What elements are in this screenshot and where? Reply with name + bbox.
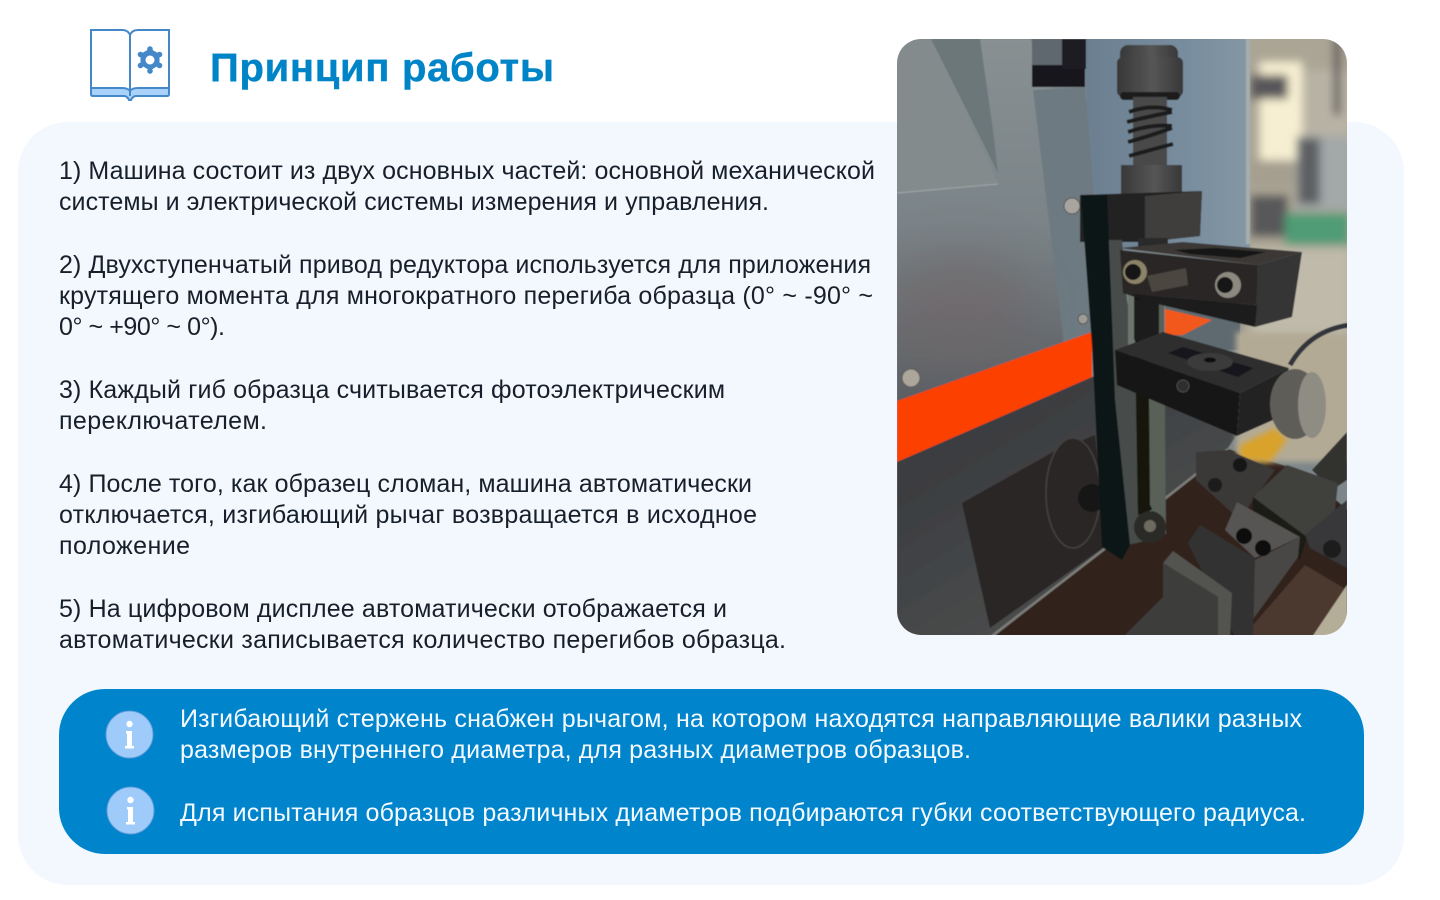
panel: notes callout — [59, 689, 1364, 854]
icon: info 2 — [107, 787, 154, 834]
title: Принцип работы — [210, 46, 554, 90]
text block: principle list: 4) После того, как образец сломан, машина автоматически — [59, 470, 752, 498]
text block: principle list: 0° ~ +90° ~ 0°). — [59, 313, 225, 341]
lower body — [897, 370, 1240, 640]
text block: note 1: Изгибающий стержень снабжен рычагом, на котором находятся направляющие валики разных — [180, 705, 1302, 733]
vertical arm — [1081, 195, 1130, 560]
text block: principle list: крутящего момента для многократного перегиба образца (0° ~ -90° ~ — [59, 282, 873, 310]
dark slot — [1032, 39, 1062, 65]
gap behind clamps — [1164, 306, 1240, 350]
text block: principle list — [59, 157, 875, 654]
text block: principle list: автоматически записывается количество перегибов образца. — [59, 626, 786, 654]
text block: principle list: переключателем. — [59, 407, 267, 435]
icon: info 1 — [106, 711, 153, 758]
top block — [1080, 191, 1202, 242]
text block: principle list: системы и электрической системы измерения и управления. — [59, 188, 769, 216]
blurred background right — [1236, 332, 1356, 462]
die blocks — [1120, 450, 1347, 640]
photo: bending test machine clamp — [890, 30, 1360, 645]
orange stripe — [897, 332, 1092, 462]
text block: note 1 — [180, 705, 1302, 764]
text block: principle list: положение — [59, 532, 190, 560]
text block: principle list: 2) Двухступенчатый привод редуктора используется для приложения — [59, 251, 871, 279]
lower clamp — [1115, 332, 1326, 439]
text block: principle list: отключается, изгибающий рычаг возвращается в исходное — [59, 501, 757, 529]
upper clamp — [1120, 242, 1302, 327]
icon: book with gear — [91, 30, 169, 100]
arm rails — [1108, 240, 1143, 545]
mounted plate — [962, 435, 1107, 628]
text block: principle list: 1) Машина состоит из двух основных частей: основной механической — [59, 157, 875, 185]
text block: principle list: 3) Каждый гиб образца считывается фотоэлектрическим — [59, 376, 725, 404]
text block: principle list: 5) На цифровом дисплее автоматически отображается и — [59, 595, 727, 623]
text block: note 1: размеров внутреннего диаметра, для разных диаметров образцов. — [180, 736, 971, 764]
top bolt — [1117, 45, 1183, 195]
text block: note 2: Для испытания образцов различных диаметров подбираются губки соответствующего радиуса. — [180, 799, 1306, 827]
screws — [1064, 198, 1080, 214]
